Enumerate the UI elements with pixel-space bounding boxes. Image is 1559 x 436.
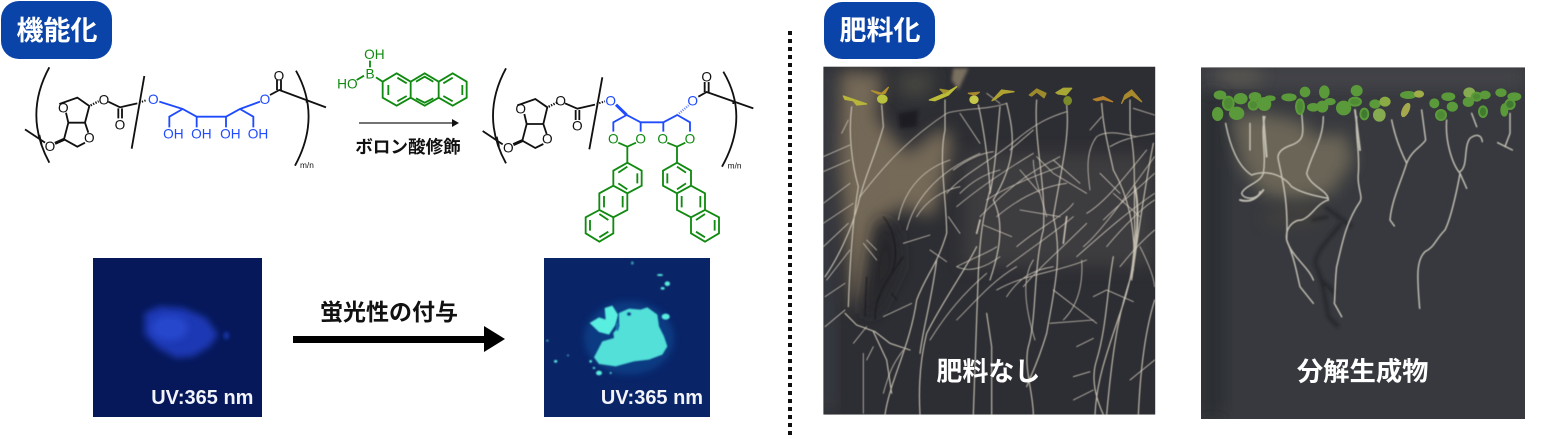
chemical structure: modified polymer bbox=[483, 68, 753, 242]
photo: decomposition product roots bbox=[1201, 67, 1525, 419]
chemical structure: modified polymer: m/n bbox=[728, 161, 742, 171]
seedlings bbox=[1213, 86, 1520, 121]
chemical structure: modified polymer: O bbox=[635, 131, 646, 146]
reagent: anthracene boronic acid: HO bbox=[337, 76, 358, 91]
dark root shadows bbox=[1312, 207, 1352, 327]
chemical structure: modified polymer: O bbox=[657, 131, 668, 146]
seedlings bbox=[843, 87, 1142, 105]
root network bbox=[825, 100, 1155, 415]
reagent: anthracene boronic acid bbox=[337, 47, 467, 106]
chemical structure: modified polymer: O bbox=[572, 119, 583, 134]
chemical structure: modified polymer: O bbox=[608, 131, 619, 146]
label: ボロン酸修飾: ボロン酸修飾 bbox=[355, 137, 461, 157]
photo: no fertilizer roots bbox=[820, 67, 1155, 415]
chemical structure: modified polymer: O bbox=[685, 131, 695, 146]
badge: 肥料化 bbox=[824, 2, 935, 59]
chemical structure: starting polymer: O bbox=[58, 100, 69, 115]
chemical structure: modified polymer: O bbox=[605, 94, 616, 109]
badge: 機能化 bbox=[1, 1, 112, 59]
chemical structure: modified polymer: O bbox=[503, 140, 514, 155]
badge: 機能化: 機能化 bbox=[16, 16, 98, 46]
chemical structure: starting polymer: O bbox=[148, 92, 159, 107]
label: UV:365 nm right: UV:365 nm bbox=[601, 387, 703, 409]
arrow: fluorescence bbox=[293, 326, 505, 352]
chemical structure: starting polymer: OH bbox=[220, 126, 241, 141]
chemical structure: modified polymer: O bbox=[555, 94, 566, 109]
badge: 肥料化: 肥料化 bbox=[840, 16, 920, 46]
chemical structure: starting polymer: O bbox=[84, 131, 95, 146]
label: UV:365 nm left: UV:365 nm bbox=[151, 387, 253, 409]
chemical structure: starting polymer: O bbox=[260, 92, 270, 107]
photo: UV after modification bbox=[544, 258, 710, 417]
chemical structure: starting polymer: m/n bbox=[300, 160, 314, 170]
chemical structure: starting polymer bbox=[25, 67, 326, 170]
chemical structure: starting polymer: OH bbox=[163, 126, 184, 141]
reagent: anthracene boronic acid: B bbox=[365, 66, 375, 81]
chemical structure: modified polymer: O bbox=[687, 94, 698, 109]
reaction arrow bbox=[359, 119, 459, 127]
reagent: anthracene boronic acid: OH bbox=[364, 47, 385, 62]
label: 肥料なし: 肥料なし bbox=[936, 357, 1040, 387]
chemical structure: starting polymer: O bbox=[99, 92, 109, 107]
chemical structure: starting polymer: OH bbox=[191, 126, 212, 141]
chemical structure: modified polymer: O bbox=[515, 102, 526, 117]
chemical structure: modified polymer: O bbox=[542, 132, 553, 147]
label: 蛍光性の付与: 蛍光性の付与 bbox=[320, 299, 458, 325]
chemical structure: starting polymer: O bbox=[45, 139, 55, 154]
chemical structure: starting polymer: O bbox=[274, 68, 284, 83]
root network bbox=[1226, 110, 1512, 317]
chemical structure: starting polymer: O bbox=[115, 117, 125, 132]
chemical structure: modified polymer: O bbox=[701, 70, 712, 85]
photo: UV before modification bbox=[93, 258, 262, 417]
label: 分解生成物: 分解生成物 bbox=[1297, 357, 1428, 387]
dark root shadows bbox=[865, 217, 903, 320]
chemical structure: starting polymer: OH bbox=[248, 126, 268, 141]
